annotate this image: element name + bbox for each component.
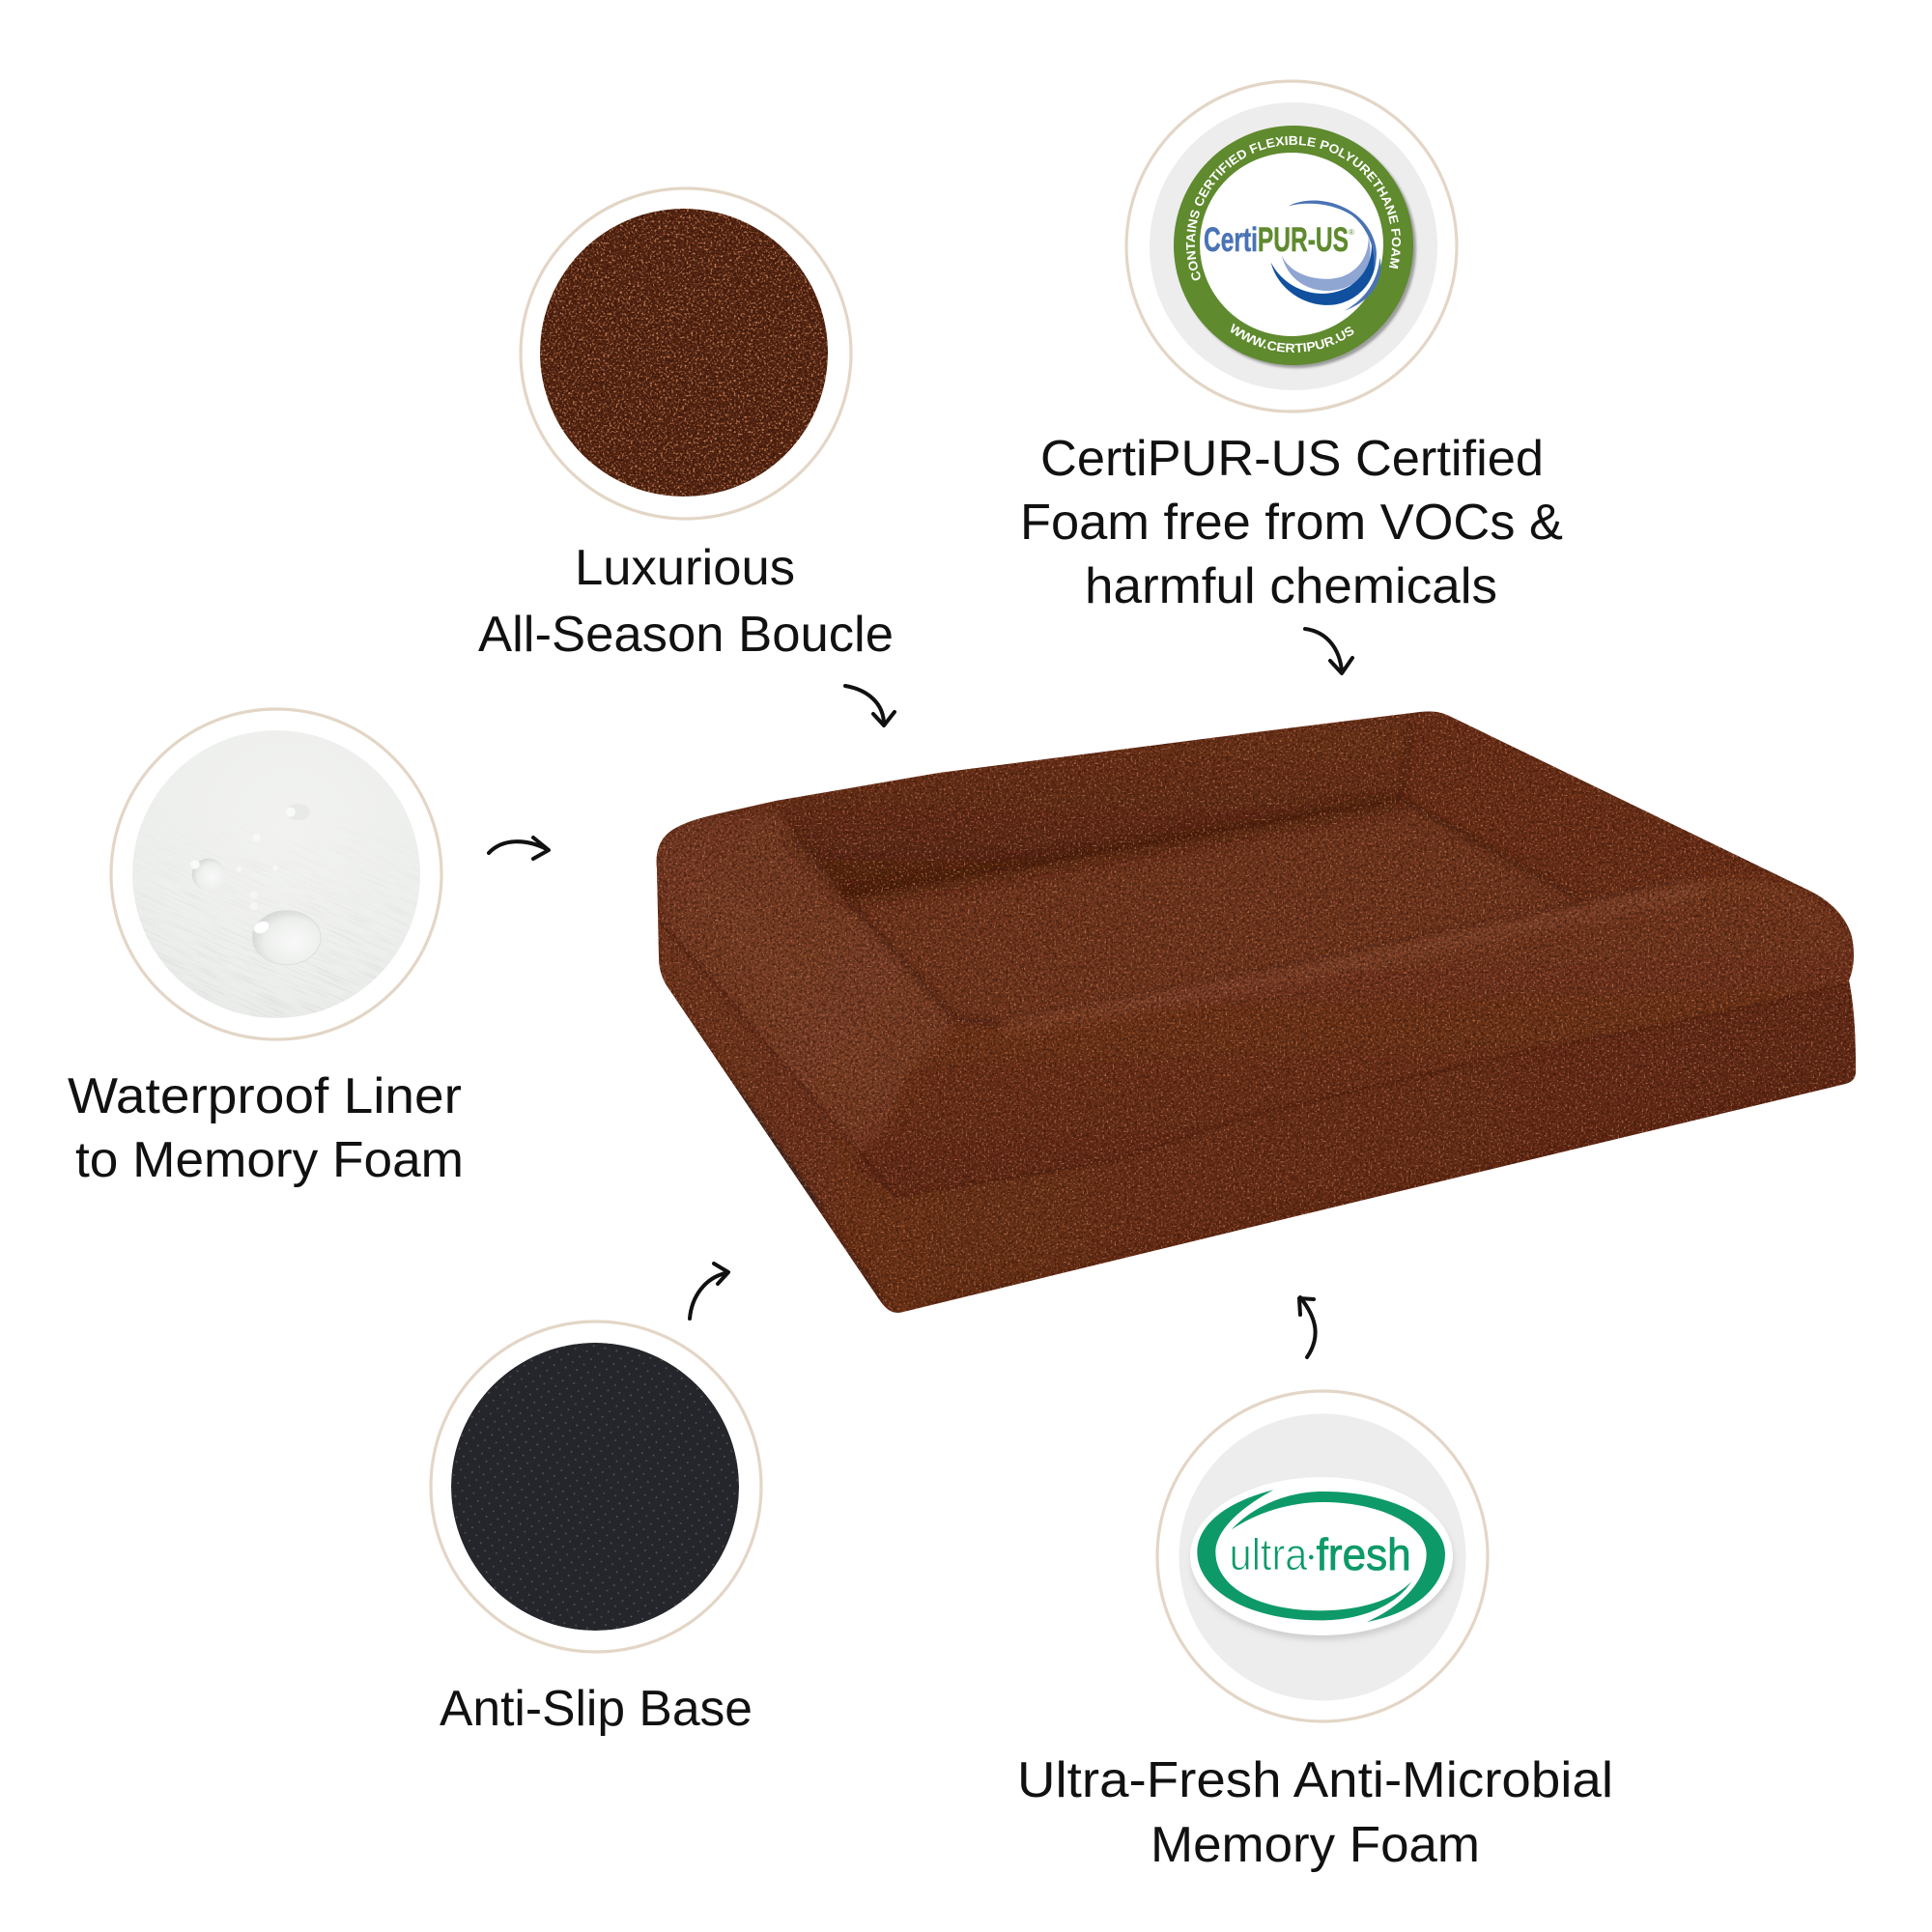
badge: swoosh bbox=[1271, 200, 1380, 311]
ring bbox=[1157, 1391, 1488, 1721]
swatch: dotted rubber bbox=[451, 1343, 739, 1631]
label: boucle: Luxurious bbox=[575, 540, 795, 596]
ring bbox=[1126, 81, 1457, 412]
grey backing bbox=[1179, 1414, 1466, 1700]
swatch: white fabric bbox=[132, 730, 420, 1018]
arrow: boucle to bed bbox=[845, 686, 895, 725]
label: anti-slip base: Anti-Slip Base bbox=[440, 1681, 753, 1737]
ring bbox=[431, 1321, 761, 1652]
label: CertiPUR-US: Foam free from VOCs & bbox=[1020, 495, 1563, 551]
ring bbox=[521, 188, 851, 519]
bed: shading and highlights bbox=[664, 724, 1850, 1312]
label: ultra-fresh: Ultra-Fresh Anti-Microbial bbox=[1017, 1752, 1613, 1808]
feature: waterproof liner swatch bbox=[109, 707, 443, 1041]
swatch: water drops bbox=[190, 804, 321, 965]
logo: green swooshes bbox=[1197, 1490, 1445, 1622]
arrow: ultra-fresh to bed bbox=[1299, 1297, 1316, 1357]
badge: curved text bbox=[1186, 135, 1401, 353]
bed: upholstered surfaces bbox=[652, 716, 1860, 1323]
label: boucle: All-Season Boucle bbox=[478, 607, 894, 663]
label: boucle bbox=[478, 540, 894, 663]
badge: green ring bbox=[1174, 126, 1413, 365]
grey backing bbox=[1150, 102, 1437, 390]
badge shadow bbox=[1177, 128, 1416, 368]
badge: curved text: WWW.CERTIPUR.US bbox=[1231, 323, 1354, 353]
feature: boucle swatch bbox=[521, 188, 851, 519]
label: waterproof liner bbox=[68, 1068, 464, 1188]
logo: wordmark: ultra bbox=[1230, 1529, 1307, 1579]
label: ultra-fresh bbox=[1017, 1752, 1613, 1873]
bed: boucle texture bbox=[647, 705, 1864, 1323]
badge: wordmark: CertiPUR-US bbox=[1204, 221, 1349, 259]
badge: curved text: CONTAINS CERTIFIED FLEXIBLE POLYURETHANE FOAM bbox=[1186, 135, 1401, 280]
badge: registered mark: ® bbox=[1349, 228, 1354, 237]
label: waterproof liner: Waterproof Liner bbox=[68, 1068, 462, 1124]
feature: CertiPUR-US badge bbox=[1124, 79, 1459, 413]
label: waterproof liner: to Memory Foam bbox=[75, 1132, 464, 1188]
swatch: boucle fabric bbox=[536, 205, 832, 500]
label: CertiPUR-US: CertiPUR-US Certified bbox=[1040, 431, 1544, 487]
label: ultra-fresh: Memory Foam bbox=[1151, 1817, 1480, 1873]
label: CertiPUR-US bbox=[1020, 431, 1563, 614]
logo: white oval bbox=[1190, 1477, 1453, 1635]
arrow: waterproof to bed bbox=[489, 838, 549, 859]
label: CertiPUR-US: harmful chemicals bbox=[1085, 558, 1497, 614]
logo: wordmark bbox=[1230, 1529, 1411, 1579]
arrow: CertiPUR-US to bed bbox=[1305, 629, 1352, 673]
product: boucle dog bed bbox=[647, 705, 1864, 1323]
arrow: anti-slip to bed bbox=[690, 1264, 728, 1319]
ring bbox=[111, 709, 441, 1039]
logo shadow bbox=[1191, 1482, 1454, 1640]
logo: wordmark: fresh bbox=[1317, 1529, 1411, 1579]
feature: anti-slip base swatch bbox=[431, 1321, 761, 1652]
feature: ultra-fresh badge bbox=[1157, 1391, 1488, 1721]
badge: white centre bbox=[1200, 153, 1383, 336]
